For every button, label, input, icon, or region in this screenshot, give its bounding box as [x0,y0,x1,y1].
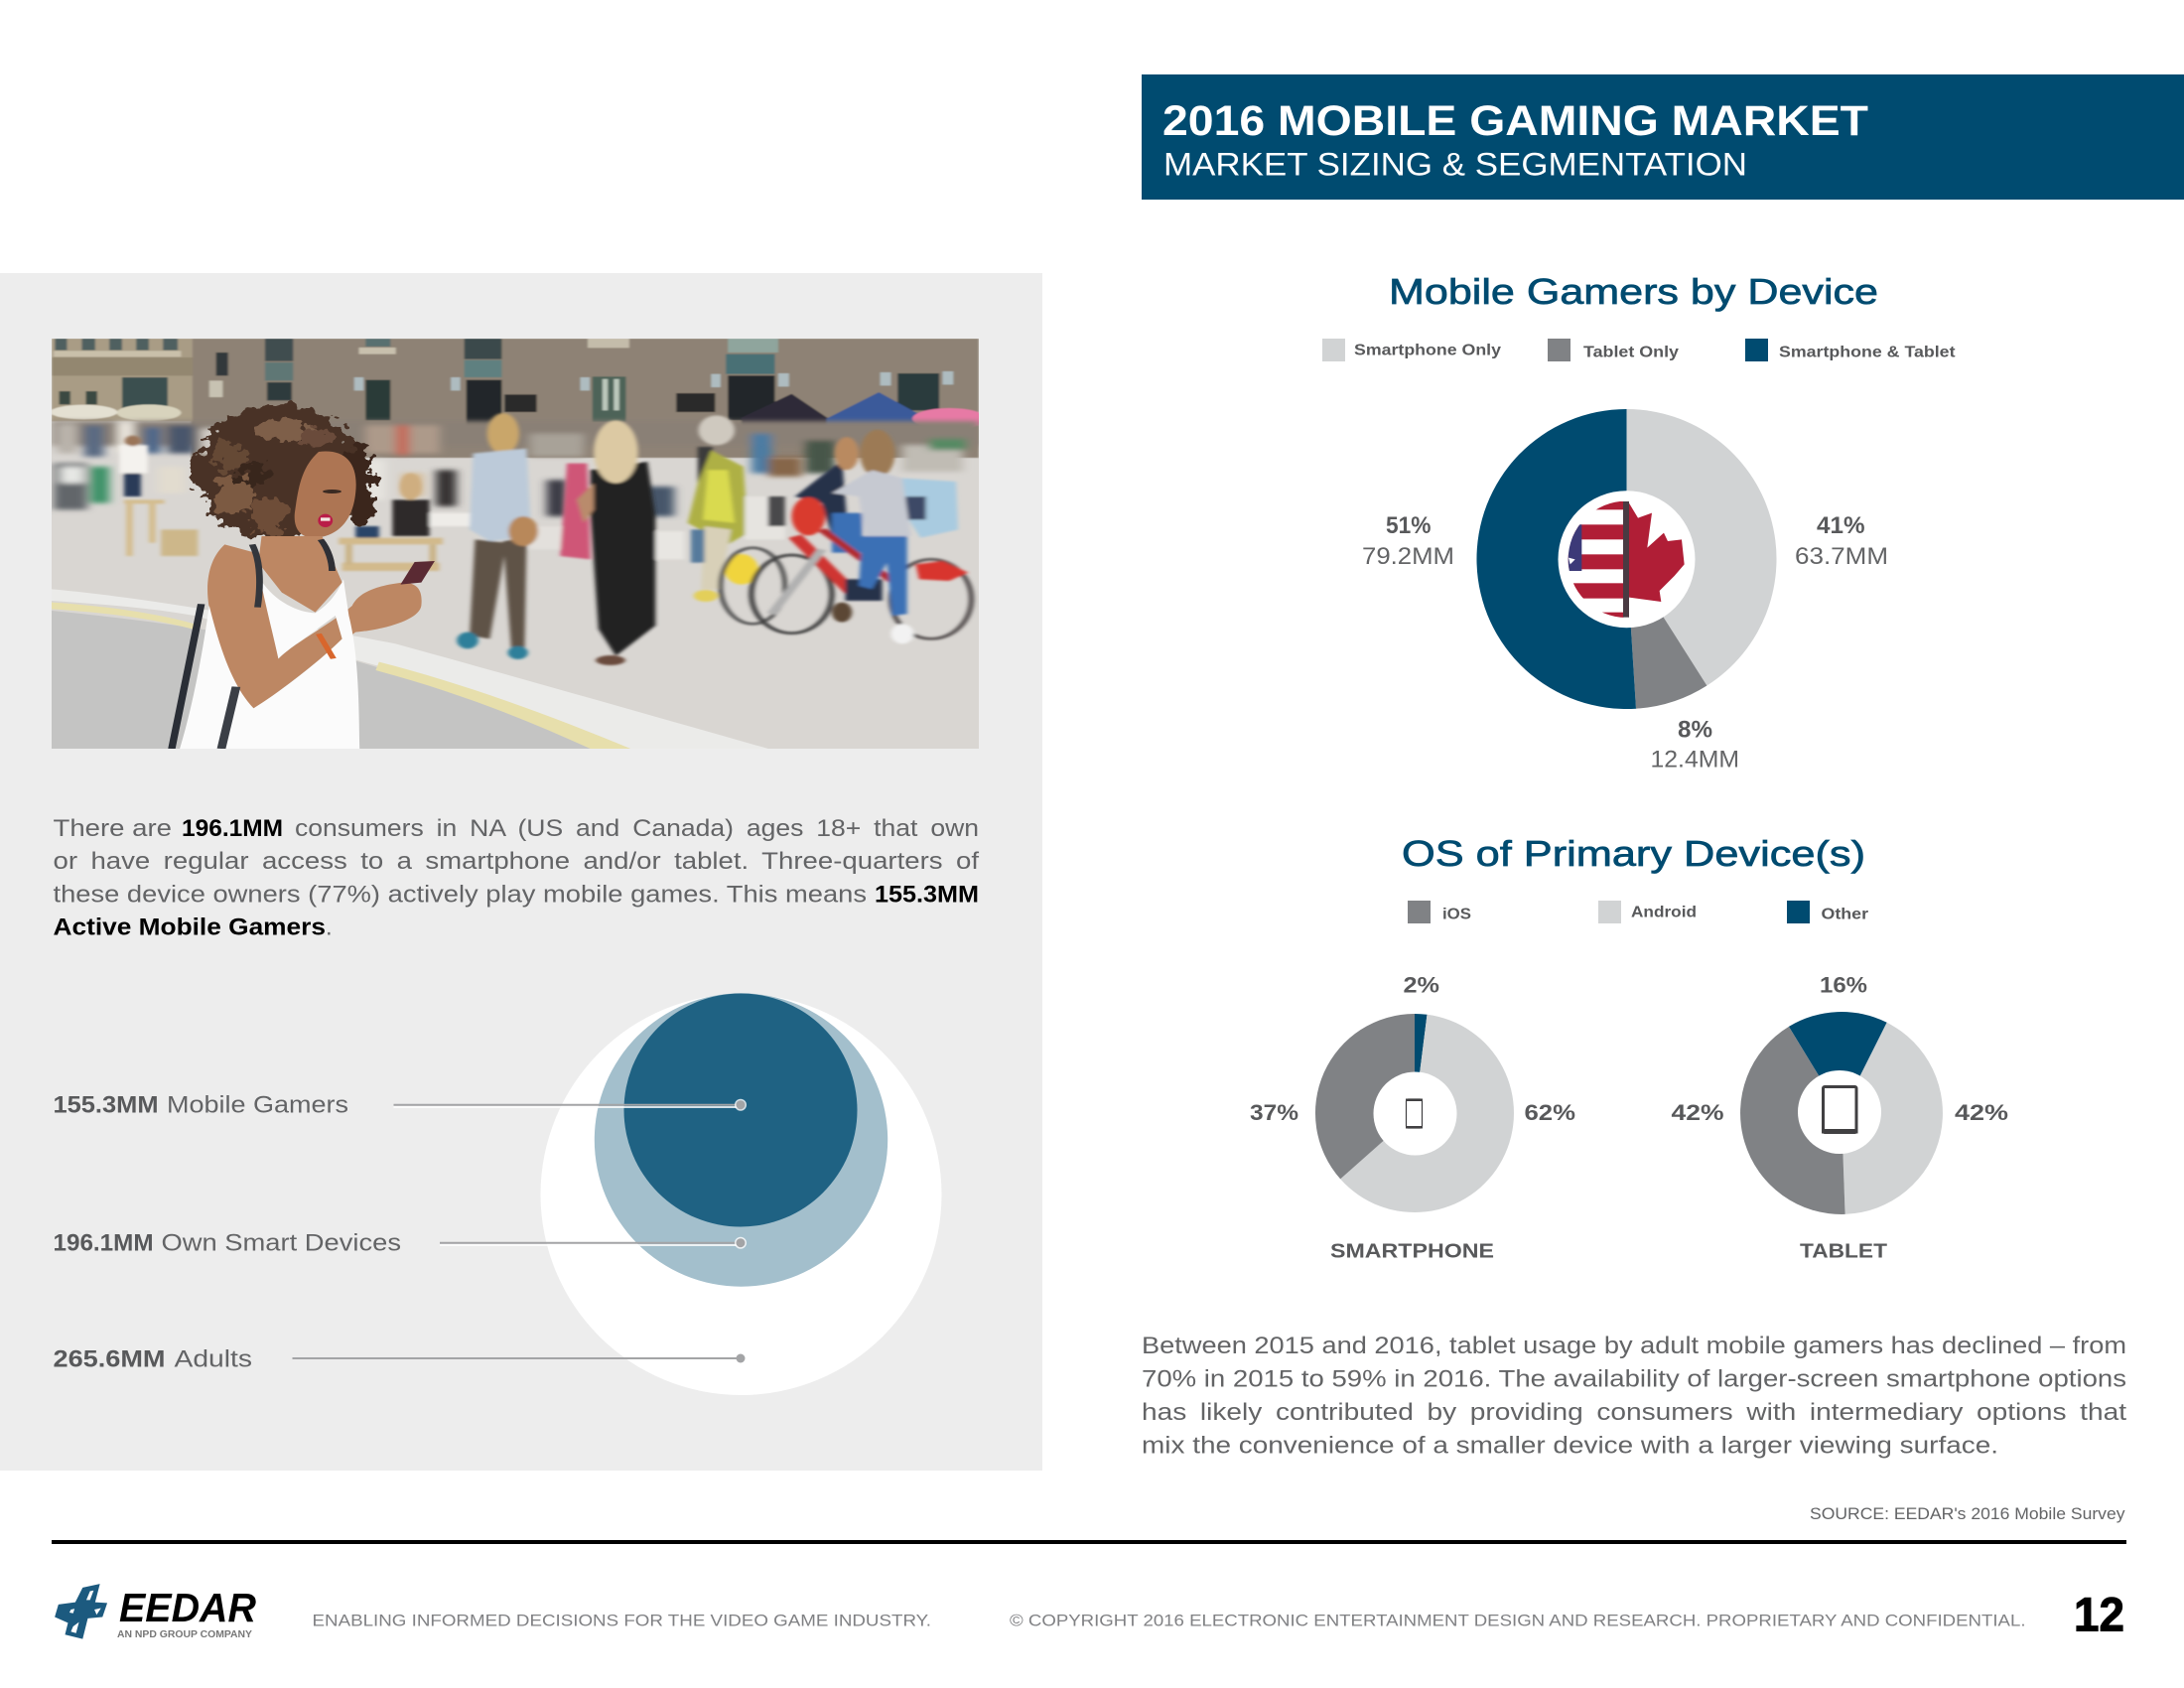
OS percentage labels: 16% [1820,973,1867,997]
right paragraph: has likely contributed by providing consumers with intermediary options that [1142,1399,2126,1426]
cyclist in grey top [860,430,895,478]
right paragraph: Between 2015 and 2016, tablet usage by adult mobile gamers has declined – from [1142,1333,2126,1359]
person in plaid shirt [487,413,519,454]
label: smartphone: SMARTPHONE [1330,1241,1494,1263]
label: tablet: TABLET [1800,1241,1887,1263]
label: adults: Adults [175,1346,252,1372]
label: own smart devices: 196.1MM [54,1229,153,1257]
body paragraph: consumers in NA (US and Canada) ages 18+ that own [295,815,979,842]
label: 8%: 12.4MM [1650,747,1739,773]
man behind, green jacket [698,447,713,496]
benches [339,538,443,544]
footer rule [52,1540,2126,1544]
body paragraph: . [326,914,333,941]
body paragraph: 155.3MM [875,882,979,908]
pink dress [560,464,591,559]
title: 2016 MOBILE GAMING MARKET [1162,97,1868,145]
icon: tablet [1822,1086,1858,1134]
legend: device [1322,339,1956,361]
logo: EEDAR: EEDAR [119,1585,256,1630]
body paragraph: 196.1MM [182,815,283,842]
right paragraph: mix the convenience of a smaller device with a larger viewing surface. [1142,1432,1998,1460]
arm and shoulder [207,544,422,708]
bicycles [721,548,785,624]
copyright: © COPYRIGHT 2016 ELECTRONIC ENTERTAINMENT DESIGN AND RESEARCH. PROPRIETARY AND CONFIDENTIAL. [1010,1613,2025,1630]
label: 8% [1650,717,1739,773]
legend: OS: Android [1631,904,1697,921]
OS percentage labels: 42% [1672,1100,1723,1125]
label: 41%: 63.7MM [1795,543,1888,570]
label: 51%: 51% [1386,512,1432,539]
OS percentage labels [1250,973,2008,1125]
heading: mobile gamers by device: Mobile Gamers by Device [1389,271,1878,312]
label: mobile gamers: Mobile Gamers [167,1092,348,1118]
page number: 12 [2074,1589,2124,1642]
legend: device: Smartphone & Tablet [1779,344,1956,361]
label: adults [54,1346,745,1372]
label: 41%: 41% [1817,512,1864,539]
left panel [0,273,1042,1471]
rider in navy [795,460,847,536]
OS percentage labels: 62% [1525,1100,1575,1125]
donut: smartphone OS [1315,1014,1514,1212]
legend: OS: Other [1821,906,1868,923]
source note: SOURCE: EEDAR's 2016 Mobile Survey [1810,1505,2125,1523]
label: 51%: 79.2MM [1362,543,1454,570]
legend: device: Smartphone Only [1354,342,1501,359]
body paragraph: these device owners (77%) actively play mobile games. This means [54,882,867,908]
body paragraph: There are [54,815,172,842]
bracelet [319,633,334,658]
icon: game controller cross [55,1584,107,1639]
legend: OS [1408,901,1868,923]
woman in black dress [591,462,655,656]
label: adults: 265.6MM [54,1346,165,1372]
footer tagline: ENABLING INFORMED DECISIONS FOR THE VIDEO GAME INDUSTRY. [312,1613,931,1630]
icon: smartphone [1406,1098,1423,1128]
seated people and crowd details [119,445,148,474]
nested circles chart [540,993,941,1395]
icon: US and Canada flag [1562,501,1685,618]
legend: device: Tablet Only [1583,344,1679,361]
label: own smart devices [54,1229,747,1257]
heading: OS of primary device: OS of Primary Device(s) [1402,833,1865,874]
OS percentage labels: 42% [1955,1100,2008,1125]
subtitle: MARKET SIZING & SEGMENTATION [1163,147,1747,183]
OS percentage labels: 2% [1404,973,1439,997]
yellow bag [725,554,758,585]
bag straps [172,604,202,749]
body paragraph: or have regular access to a smartphone and/or tablet. Three-quarters of [54,848,979,875]
header banner [1142,74,2184,200]
road and kerb [52,589,768,749]
face and neck [295,452,356,538]
donut: mobile gamers by device [1476,409,1777,709]
label: mobile gamers: 155.3MM [54,1092,159,1118]
body paragraph: Active Mobile Gamers [54,914,326,941]
logo: EEDAR [55,1584,256,1640]
right paragraph [1142,1333,2126,1460]
photo: woman using a smartphone in a plaza [52,339,979,749]
legend: OS: iOS [1442,906,1471,923]
hair [195,404,375,539]
dress [180,579,359,749]
label: mobile gamers [54,1092,747,1118]
logo: EEDAR: AN NPD GROUP COMPANY [117,1629,252,1640]
donut: tablet OS [1740,1012,1943,1214]
body paragraph [54,815,979,941]
label: own smart devices: Own Smart Devices [161,1229,401,1257]
phone [400,561,435,585]
OS percentage labels: 37% [1250,1100,1298,1125]
label: 8%: 8% [1678,717,1712,743]
woman [172,404,435,749]
right paragraph: 70% in 2015 to 59% in 2016. The availability of larger-screen smartphone options [1142,1366,2126,1392]
label: 51% [1362,512,1454,570]
ice cream cart [902,479,958,538]
label: 41% [1795,512,1888,570]
